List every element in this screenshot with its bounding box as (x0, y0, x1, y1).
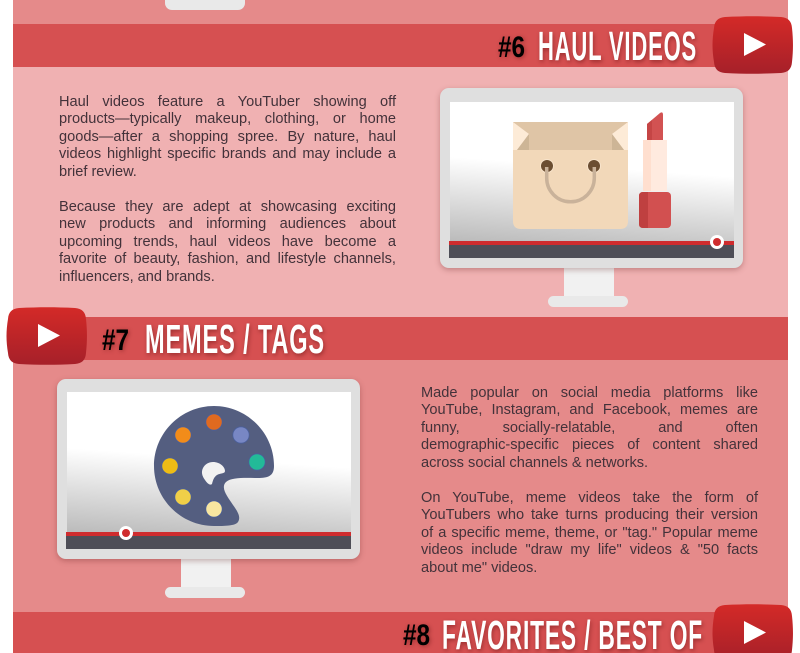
heading: #7 memes / tags (102, 316, 325, 362)
text block: haul videos description: upcoming trends, haul videos have become a (59, 234, 396, 250)
heading: #8 favorites / best of (403, 612, 703, 653)
text block: memes description: demographic-specific pieces of content shared (421, 437, 758, 453)
panel: haul videos background (13, 67, 788, 317)
text block: haul videos description: Because they are adept at showcasing exciting (59, 198, 396, 214)
text block: memes description: On YouTube, meme videos take the form of (421, 490, 758, 506)
icon: play button 6 (712, 16, 793, 74)
icon: play button 8 (712, 604, 793, 653)
text block: haul videos description: Haul videos feature a YouTuber showing off (59, 94, 396, 110)
text block: haul videos description: videos highlight specific brands and may include a (59, 146, 396, 162)
heading: #6 haul videos: #6 (498, 31, 525, 64)
text block: haul videos description: favorite of beauty, fashion, and lifestyle channels, (59, 251, 396, 267)
text block: haul videos description: products—typically makeup, clothing, or home (59, 111, 396, 127)
text block: haul videos description: brief review. (59, 164, 137, 180)
heading band: haul videos (13, 24, 788, 67)
text block: haul videos description: goods—after a shopping spree. By nature, haul (59, 128, 396, 144)
monitor: haul videos (440, 88, 743, 307)
text block: memes description: YouTube, Instagram, and Facebook, memes are (421, 402, 758, 418)
text block: haul videos description: new products and informing audiences about (59, 216, 396, 232)
heading band: favorites (13, 612, 788, 653)
heading band: memes (13, 317, 788, 360)
icon: paint palette (154, 406, 274, 526)
text block: memes description: YouTubers who take turns producing their version (421, 507, 758, 523)
heading: #7 memes / tags: MEMES / TAGS (145, 316, 325, 362)
panel: memes background (13, 360, 788, 612)
text block: memes description: of a specific meme, theme, or "tag." Popular meme (421, 524, 758, 540)
panel: top section background (13, 0, 788, 24)
icon: shopping bag (513, 122, 628, 229)
text block: haul videos description: influencers, and brands. (59, 268, 215, 284)
monitor base from previous section (165, 0, 245, 10)
text block: memes description: Made popular on social media platforms like (421, 384, 758, 400)
text block: memes description: funny, socially-relatable, and often (421, 420, 758, 436)
icon: lipstick (639, 112, 671, 228)
text block: memes description: videos include "draw my life" videos & "50 facts (421, 542, 758, 558)
heading: #6 haul videos (498, 23, 697, 69)
text block: haul videos description (59, 94, 396, 284)
icon: play button 7 (6, 307, 87, 365)
heading: #8 favorites / best of: #8 (403, 619, 430, 652)
heading: #7 memes / tags: #7 (102, 324, 129, 357)
text block: memes description: across social channels & networks. (421, 454, 648, 470)
text block: memes description (421, 384, 758, 576)
monitor: memes / tags (57, 379, 360, 598)
text block: memes description: about me" videos. (421, 560, 537, 576)
